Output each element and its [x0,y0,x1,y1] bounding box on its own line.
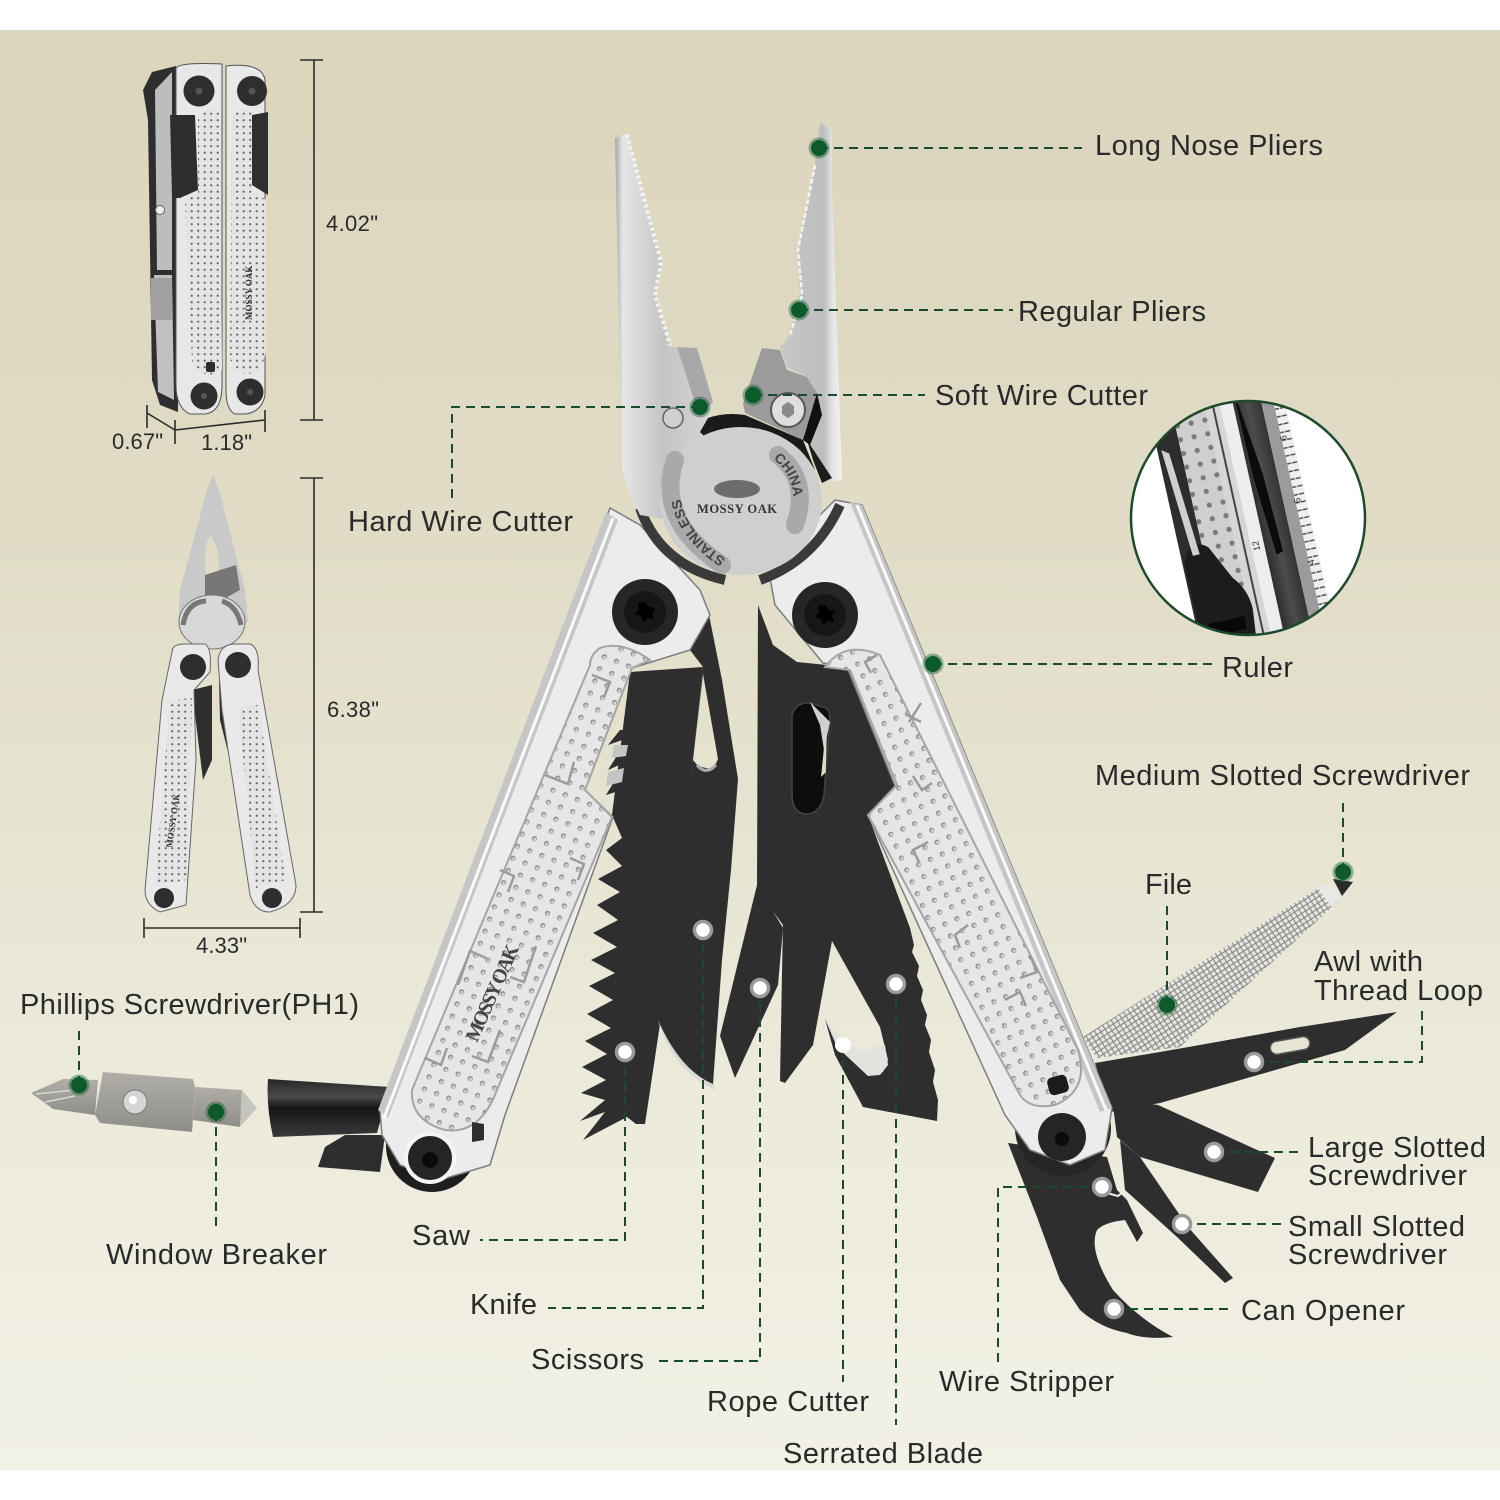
text: folded tool brand: MOSSY OAK [244,266,254,320]
label: awl with thread loop: Thread Loop [1314,975,1483,1007]
label: hard wire cutter: Hard Wire Cutter [348,506,573,538]
marker: knife [694,922,712,938]
icon: logo ellipse [714,480,760,498]
leader: wire stripper [998,1187,1102,1362]
label: wire stripper: Wire Stripper [939,1366,1114,1398]
right jaw teeth [790,165,815,335]
left jaw teeth [627,135,670,345]
marker: awl [1246,1054,1262,1070]
disc: china lettering band [778,455,800,525]
text: ruler numbers: 5 [1292,497,1303,504]
label: saw: Saw [412,1220,471,1252]
text: stainless: STAINLESS [672,500,724,566]
leader: hard wire cutter [452,407,700,500]
marker: can opener [1106,1300,1122,1318]
leader: soft wire cutter [753,394,925,396]
label: large slotted screwdriver: Large Slotted [1308,1132,1486,1164]
marker: rope cutter [835,1037,851,1053]
leader: long nose pliers [819,147,1082,149]
label: scissors: Scissors [531,1344,644,1376]
dimension: folded depth [147,405,175,444]
marker: long nose pliers [811,140,827,156]
marker: saw [616,1044,634,1060]
label: medium slotted screwdriver: Medium Slotted Screwdriver [1095,760,1470,792]
label: large slotted screwdriver [1308,1132,1486,1192]
tool: saw blade [580,667,703,1140]
leader: small slotted screwdriver [1182,1223,1285,1225]
label: regular pliers: Regular Pliers [1018,296,1206,328]
leader: awl [1254,1007,1422,1062]
label: window breaker: Window Breaker [106,1239,327,1271]
leader: phillips screwdriver [78,1025,80,1085]
leader: knife [548,930,703,1308]
dimension: opened width [144,918,300,938]
inset: ruler detail [1130,400,1366,636]
dimension: folded width [175,410,265,432]
hinge shadows [640,505,840,580]
marker: soft wire cutter [745,387,761,403]
text: ruler numbers: 6 [1278,434,1289,441]
leader: ruler [933,663,1212,665]
label: rope cutter: Rope Cutter [707,1386,869,1418]
leader: window breaker [215,1112,217,1230]
label: small slotted screwdriver: Screwdriver [1288,1239,1447,1271]
marker: window breaker [208,1104,224,1120]
label: knife: Knife [470,1289,537,1321]
tool: large slotted screwdriver [1112,1098,1275,1192]
text: ruler numbers: 4 [1306,558,1316,565]
leader: regular pliers [799,309,1013,311]
text: left handle brand: MOSSY OAK [461,941,524,1045]
marker: serrated blade [888,976,904,992]
tool: awl with thread loop [1095,1012,1397,1112]
leader: serrated blade [895,984,897,1425]
label: soft wire cutter: Soft Wire Cutter [935,380,1148,412]
marker: wire stripper [1094,1178,1110,1196]
label: large slotted screwdriver: Screwdriver [1308,1160,1467,1192]
tool: knife [658,610,738,1090]
tool: pliers head [615,123,844,585]
tool: phillips and window breaker bit [31,1072,257,1132]
marker: scissors [752,980,768,996]
label: can opener: Can Opener [1241,1295,1405,1327]
label: long nose pliers: Long Nose Pliers [1095,130,1323,162]
leader: scissors [655,988,760,1361]
tool: file [1083,879,1353,1058]
text: china: CHINA [775,454,802,496]
text: ruler numbers: 12 [1250,540,1262,552]
text: mossy oak: MOSSY OAK [697,502,777,516]
tool: right handle [770,500,1112,1176]
leader: medium slotted screwdriver [1342,800,1344,872]
dimension: folded height [300,60,323,420]
leader: file [1166,905,1168,1005]
marker: medium slotted screwdriver [1335,864,1351,880]
value: 4.33 inches: 4.33" [196,933,247,958]
tool: can opener and wire stripper [1008,1143,1173,1338]
label: file: File [1145,869,1192,901]
tool: serrated blade and rope cutter [757,605,938,1121]
marker: regular pliers [791,302,807,318]
value: 1.18 inches: 1.18" [201,430,252,455]
label: small slotted screwdriver [1288,1211,1465,1271]
disc: stainless lettering band [670,460,722,565]
label: phillips screwdriver: Phillips Screwdriver(PH1) [20,989,359,1021]
tool: small slotted screwdriver [1120,1140,1233,1283]
tool: folded multitool [143,64,268,414]
label: awl with thread loop: Awl with [1314,946,1423,978]
marker: large slotted screwdriver [1206,1144,1222,1160]
leader: rope cutter [842,1045,844,1382]
label: awl with thread loop [1314,946,1483,1007]
leader: can opener [1114,1308,1232,1310]
value: 4.02 inches: 4.02" [326,211,378,236]
marker: hard wire cutter [692,399,708,415]
label: small slotted screwdriver: Small Slotted [1288,1211,1465,1243]
tool: opened multitool [145,475,296,912]
text: ruler numbers [1252,436,1314,564]
marker: small slotted screwdriver [1174,1216,1190,1232]
label: ruler: Ruler [1222,652,1293,684]
tool: left handle [268,508,710,1192]
leader: large slotted screwdriver [1214,1151,1304,1153]
marker: ruler [925,656,941,672]
marker: phillips screwdriver [71,1077,87,1093]
dimension: opened height [300,478,323,912]
leader: saw [480,1052,625,1240]
tool: scissors [720,885,832,1083]
text: opened tool brand: MOSSY OAK [164,793,182,848]
value: 6.38 inches: 6.38" [327,697,379,722]
marker: file [1159,997,1175,1013]
value: 0.67 inches: 0.67" [112,429,163,454]
label: serrated blade: Serrated Blade [783,1438,983,1470]
